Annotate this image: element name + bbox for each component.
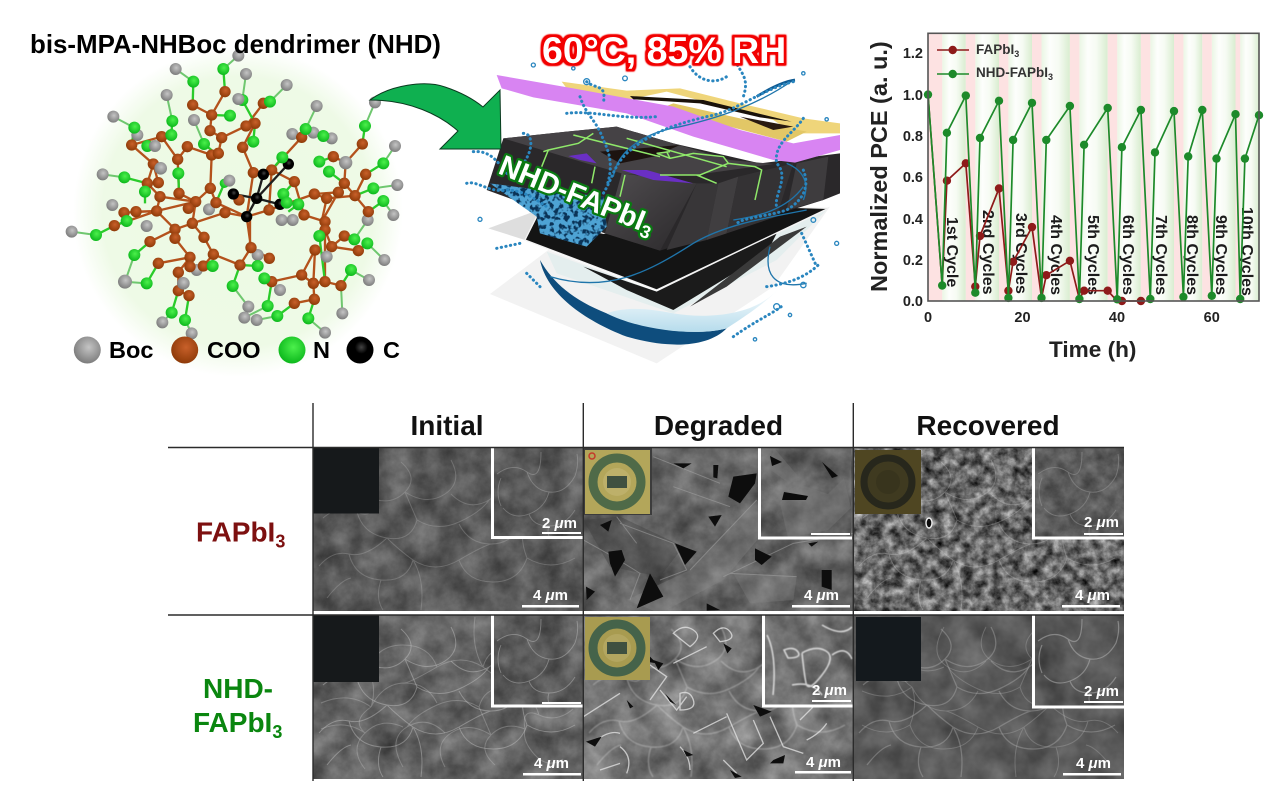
x axis title: Time (h): [1049, 337, 1136, 362]
row heading: FAPbI3: FAPbI: [196, 516, 275, 548]
device illustration with water splash: [467, 57, 840, 363]
y axis ticks: 1.0: [903, 88, 923, 104]
magnified inset: [1032, 448, 1124, 539]
table grid lines: [168, 403, 1124, 781]
y axis title: Normalized PCE (a. u.): [866, 41, 892, 292]
scale bars: [792, 533, 850, 608]
photo inset: dark film: [313, 615, 379, 682]
SEM panel: FAPbI3 degraded: [583, 448, 853, 613]
SEM panel: FAPbI3 initial: [313, 448, 583, 611]
scale bars: 4 μm: [1076, 755, 1111, 772]
legend: N: N: [313, 337, 330, 363]
photo inset: degraded film with logo: [583, 448, 652, 515]
scale bars: 2 μm: [1084, 514, 1119, 531]
column heading: Recovered: Recovered: [916, 410, 1060, 441]
lower translucent sheets: [488, 207, 830, 363]
x axis ticks: 40: [1109, 310, 1125, 326]
atom legend: [74, 336, 400, 364]
row heading: NHD-FAPbI3: NHD-: [203, 673, 273, 704]
magnified inset: [762, 615, 853, 706]
scale bars: 4 μm: [804, 587, 839, 604]
y axis ticks: 0.4: [903, 212, 923, 228]
magnified inset: [758, 448, 852, 538]
cycle background bands: [928, 33, 1259, 301]
x axis ticks: [924, 310, 1220, 326]
chart legend: FAPbI: [976, 42, 1014, 57]
photo inset: recovered film: [855, 450, 921, 514]
row heading: FAPbI3: 3: [275, 532, 285, 552]
chart legend: 3: [1048, 72, 1053, 82]
y axis ticks: 1.2: [903, 46, 923, 62]
row heading: NHD-FAPbI3: FAPbI: [193, 707, 272, 738]
SEM panel: NHD-FAPbI3 degraded: [583, 615, 853, 779]
cycle labels: 4th Cycles: [1047, 215, 1064, 295]
cycle labels: [943, 207, 1255, 296]
molecule panel: bis-MPA-NHBoc dendrimer: [66, 47, 403, 377]
label: 60°C, 85% RH: 60°C, 85% RH: [542, 29, 786, 71]
cycle labels: 8th Cycles: [1183, 215, 1200, 295]
SEM panel: NHD-FAPbI3 recovered: [853, 615, 1124, 779]
arrow: dendrimer to device: [370, 84, 501, 149]
title: dendrimer: bis-MPA-NHBoc dendrimer (NHD): [30, 31, 441, 59]
SEM panel: FAPbI3 recovered: [853, 448, 1124, 611]
chart legend: [937, 42, 1053, 82]
cycle labels: 10th Cycles: [1238, 207, 1255, 296]
x axis ticks: 0: [924, 310, 932, 326]
series: NHD-FAPbI3: [924, 90, 1263, 303]
cycle labels: 6th Cycles: [1119, 215, 1136, 295]
label: NHD-FAPbI3 on device: NHD-FAPbI: [494, 150, 650, 237]
purple transport layer: [497, 75, 840, 163]
y axis ticks: 0.2: [903, 253, 923, 269]
scale bars: 2 μm: [1084, 683, 1119, 700]
plot frame: [928, 33, 1259, 301]
scale bars: [795, 682, 851, 774]
x axis ticks: 60: [1204, 310, 1220, 326]
y axis ticks: 0.0: [903, 294, 923, 310]
perovskite substrate: [525, 207, 828, 290]
cycle labels: 1st Cycle: [943, 217, 960, 287]
perovskite grains: [487, 127, 840, 251]
cycle labels: 3rd Cycles: [1012, 213, 1029, 294]
y axis ticks: 0.8: [903, 129, 923, 145]
chart legend: NHD-FAPbI: [976, 65, 1048, 80]
scale bars: 4 μm: [806, 754, 841, 771]
scale bars: [1063, 683, 1123, 776]
metal electrode: [562, 82, 840, 142]
magnified inset: [1032, 615, 1124, 708]
scale bars: 2 μm: [542, 515, 577, 532]
chart: normalized PCE over time: [866, 33, 1263, 362]
photo inset: dark film: [313, 448, 379, 514]
SEM panel: NHD-FAPbI3 initial: [313, 615, 583, 779]
dendrimer ball and stick model: [66, 50, 403, 339]
legend: Boc: [74, 336, 153, 364]
water splash: [467, 57, 839, 345]
legend: Boc: Boc: [109, 337, 153, 363]
photo inset: dark film: [856, 617, 921, 681]
scale bars: [523, 702, 581, 776]
y axis ticks: 0.6: [903, 170, 923, 186]
legend: COO: [171, 336, 261, 364]
column heading: Degraded: Degraded: [654, 410, 783, 441]
legend: C: [346, 336, 400, 364]
legend: N: [278, 336, 330, 364]
magnified inset: [491, 615, 583, 707]
scale bars: 4 μm: [533, 587, 568, 604]
x axis ticks: 20: [1014, 310, 1031, 326]
scale bars: 4 μm: [1075, 587, 1110, 604]
scale bars: 2 μm: [812, 682, 847, 699]
series: FAPbI3: [928, 95, 1145, 305]
row heading: NHD-FAPbI3: 3: [272, 722, 282, 742]
scale bars: [1062, 514, 1123, 608]
photo inset: degraded film with logo: [585, 617, 650, 680]
column heading: Initial: Initial: [410, 410, 484, 441]
cycle labels: 7th Cycles: [1152, 215, 1169, 295]
chart legend: 3: [1014, 49, 1019, 59]
label: NHD-FAPbI3 on device: 3: [637, 221, 654, 243]
magnified inset: [491, 448, 583, 539]
y axis ticks: [903, 46, 923, 310]
cycle labels: 9th Cycles: [1212, 215, 1229, 295]
legend: C: C: [383, 337, 400, 363]
cycle labels: 5th Cycles: [1084, 215, 1101, 295]
cycle labels: 2nd Cycles: [979, 210, 996, 295]
scale bars: [522, 515, 581, 608]
scale bars: 4 μm: [534, 755, 569, 772]
light green halo: [73, 47, 403, 377]
legend: COO: COO: [207, 337, 261, 363]
